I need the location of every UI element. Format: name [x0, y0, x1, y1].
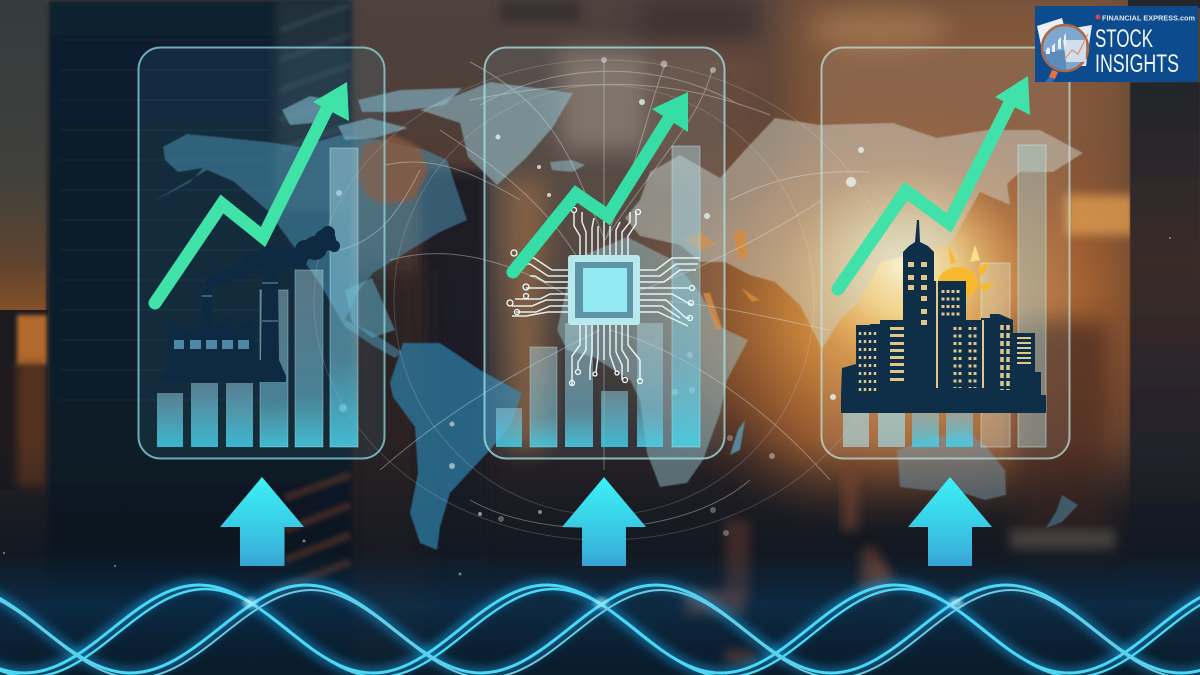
- glowing waves: [0, 550, 1200, 675]
- bar chart: [843, 145, 1046, 447]
- icon: microchip: [568, 255, 640, 325]
- icon: smoke: [206, 226, 340, 288]
- distant building windows: [60, 40, 270, 400]
- south america: [390, 343, 522, 550]
- growth arrow: [155, 82, 349, 303]
- world map: [150, 82, 1083, 550]
- bar chart: [496, 146, 700, 447]
- greenland: [420, 82, 573, 185]
- iceland: [550, 160, 585, 172]
- dotted windows: [860, 290, 1008, 392]
- circuit end nodes: [507, 208, 694, 386]
- icon: document and magnifier: [1037, 18, 1092, 82]
- panel: industry: [138, 48, 384, 458]
- building windows: [890, 262, 1031, 388]
- glass card: [822, 48, 1070, 458]
- arctic islands: [282, 88, 462, 140]
- new zealand: [1046, 495, 1078, 528]
- inland seas: [683, 230, 760, 330]
- growth arrow: [838, 76, 1030, 289]
- up arrow right: [908, 477, 992, 566]
- bar chart: [157, 148, 358, 447]
- network lines and nodes: [314, 60, 894, 540]
- growth arrow: [513, 92, 688, 272]
- central america tint: [345, 278, 395, 338]
- north america: [150, 134, 467, 358]
- up arrow middle: [562, 477, 646, 566]
- africa: [557, 237, 748, 487]
- icon: circuit traces: [512, 210, 700, 385]
- up arrow left: [220, 477, 304, 566]
- glass card: [484, 48, 724, 458]
- panel: technology: [484, 48, 724, 458]
- icon: factory: [161, 279, 286, 382]
- logo: stock insights badge: [1035, 6, 1198, 82]
- scattered light nodes: [3, 57, 1171, 576]
- icon: sun: [938, 245, 995, 299]
- icon: city skyline: [841, 220, 1046, 413]
- logo dot: [1096, 14, 1100, 20]
- madagascar: [730, 420, 745, 455]
- logo word stock: STOCK: [1095, 25, 1153, 53]
- eurasia: [625, 118, 1083, 349]
- canadian interior: [358, 135, 428, 205]
- glass card: [138, 48, 384, 458]
- australia: [897, 430, 1006, 500]
- panel: real estate: [822, 48, 1070, 458]
- logo publisher name: FINANCIAL EXPRESS.com: [1102, 14, 1195, 22]
